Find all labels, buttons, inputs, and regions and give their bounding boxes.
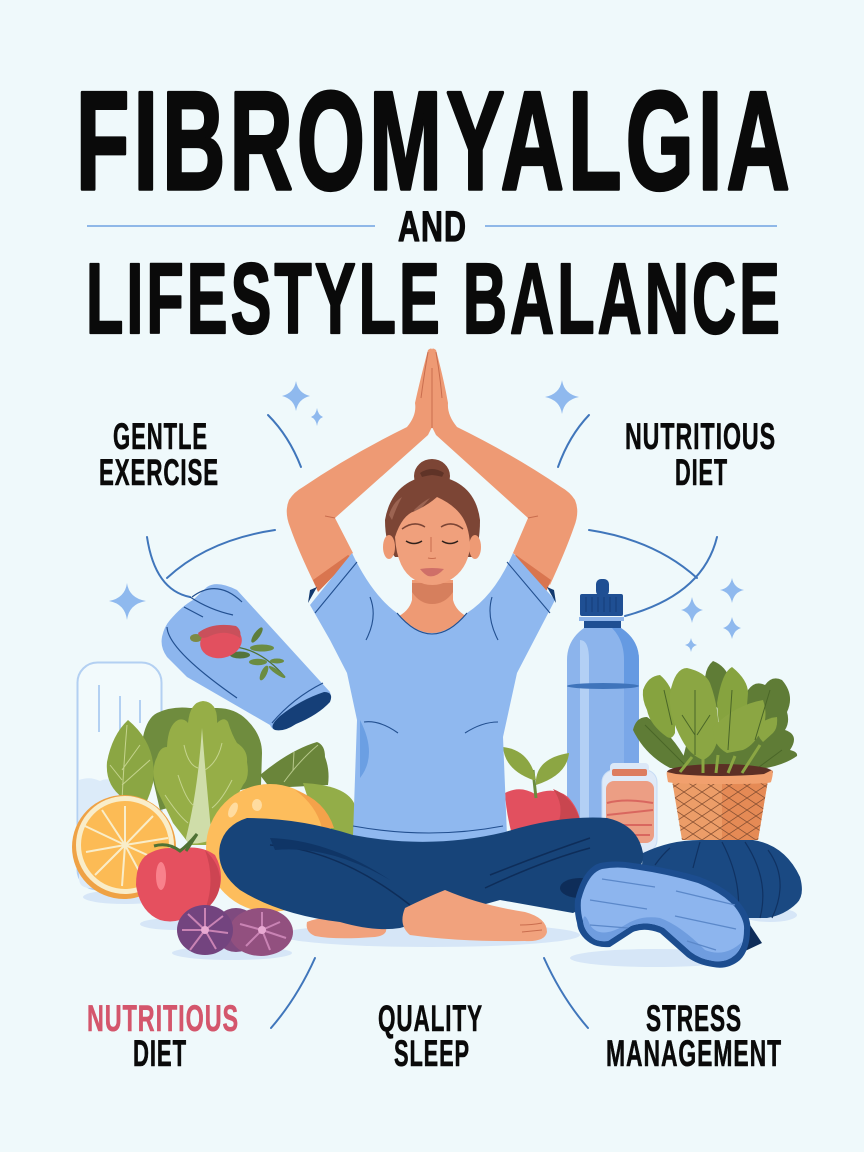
lettuce: [154, 701, 248, 845]
connector arcs: [147, 415, 717, 1028]
t-shirt: [308, 553, 556, 843]
arms: [287, 348, 577, 592]
seated woman: [219, 348, 643, 941]
sparkles: [109, 380, 744, 652]
label: stress management: [606, 998, 782, 1074]
neck: [395, 580, 470, 650]
foot left: [307, 918, 386, 938]
face: [395, 497, 470, 585]
left vegetables: [72, 701, 356, 956]
label: quality sleep: SLEEP: [394, 1033, 470, 1074]
label: nutritious diet top: DIET: [675, 452, 728, 493]
water bottle: [567, 579, 639, 820]
hair: [385, 459, 480, 557]
label: nutritious diet top: [625, 416, 776, 493]
light leaves: [643, 675, 675, 738]
basket pot: [667, 745, 773, 840]
floating sleeve with fruit motif: [162, 584, 331, 730]
ears: [383, 535, 395, 559]
veins: [645, 690, 782, 770]
label: nutritious diet bottom: NUTRITIOUS: [87, 998, 239, 1039]
back dark leaves: [705, 661, 730, 710]
red apple: [136, 834, 221, 922]
big dark cabbage: [143, 708, 262, 810]
label: gentle exercise: GENTLE: [113, 416, 208, 457]
sleep mask: [575, 862, 762, 968]
lime leaf: [303, 783, 356, 836]
narrow leaf: [107, 720, 154, 805]
big orange: [206, 784, 334, 912]
label: gentle exercise: [99, 416, 219, 493]
label: nutritious diet bottom: DIET: [133, 1033, 187, 1074]
glass of water: [78, 662, 162, 890]
label: gentle exercise: EXERCISE: [99, 452, 219, 493]
label: quality sleep: [378, 998, 483, 1074]
potted plant: [633, 661, 797, 840]
purple slices: [177, 905, 293, 956]
orange slice: [72, 795, 176, 899]
floor shadows: [83, 890, 797, 967]
neck pillow: [640, 840, 802, 918]
fruit motif: [190, 622, 286, 682]
label: nutritious diet top: NUTRITIOUS: [625, 416, 776, 457]
label: stress management: STRESS: [646, 998, 742, 1039]
small red apple and sprout: [503, 747, 580, 835]
title: AND: [398, 203, 467, 251]
label: quality sleep: QUALITY: [378, 998, 483, 1039]
dark back leaf: [260, 742, 329, 788]
supplement jar: [602, 763, 657, 852]
label: nutritious diet bottom: [87, 998, 239, 1074]
pants: [219, 818, 643, 929]
foot right: [402, 890, 547, 941]
title: [76, 62, 794, 355]
